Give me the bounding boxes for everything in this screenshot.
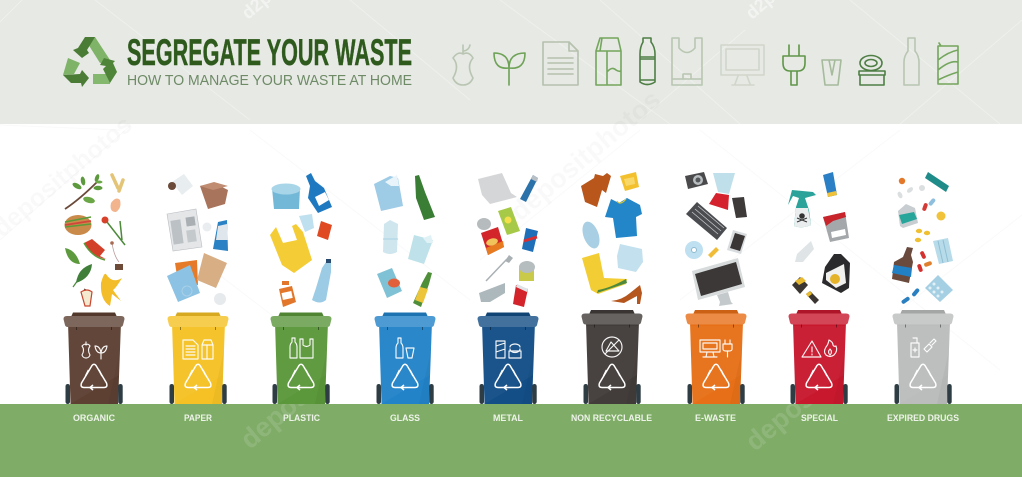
waste items: expired drugs xyxy=(892,172,953,305)
bin: paper xyxy=(168,312,228,404)
bin group: metal xyxy=(477,173,538,424)
waste items: non recyclable xyxy=(579,172,643,304)
bin: expired drugs xyxy=(892,310,954,404)
bin: metal xyxy=(478,312,538,404)
label: non recyclable: NON RECYCLABLE xyxy=(571,413,652,424)
bin group: glass xyxy=(374,175,436,424)
label: expired drugs: EXPIRED DRUGS xyxy=(887,413,959,424)
icon: plastic bag xyxy=(672,38,702,85)
icon: document xyxy=(543,42,578,85)
icon: plug xyxy=(783,45,805,85)
icon: milk carton xyxy=(596,38,621,85)
waste items: glass xyxy=(374,175,435,307)
waste items: paper xyxy=(167,174,228,305)
bin: special xyxy=(788,310,850,404)
label: glass: GLASS xyxy=(390,413,420,424)
waste items: plastic xyxy=(270,173,332,307)
bin group: plastic xyxy=(270,173,332,424)
bin group: special xyxy=(788,172,850,424)
header band xyxy=(0,0,1022,124)
label: special: SPECIAL xyxy=(801,413,838,424)
label: organic: ORGANIC xyxy=(73,413,115,424)
bin: e-waste xyxy=(686,310,746,404)
bin group: paper xyxy=(167,174,228,424)
bin: plastic xyxy=(270,312,332,404)
recycling logo xyxy=(63,37,117,87)
bin group: non recyclable xyxy=(571,172,652,424)
icon: cup xyxy=(822,60,841,85)
watermark text: depositphotos xyxy=(740,314,901,457)
bin: glass xyxy=(374,312,436,404)
watermark text: depositphotos xyxy=(505,84,666,227)
bin: non recyclable xyxy=(582,310,642,404)
icon: glass bottle xyxy=(904,38,919,85)
waste items: organic xyxy=(64,174,125,306)
title: SEGREGATE YOUR WASTE xyxy=(127,32,412,73)
waste items: metal xyxy=(477,173,538,307)
icon: apple core xyxy=(453,45,473,85)
label: paper: PAPER xyxy=(184,413,212,424)
bin group: e-waste xyxy=(685,172,747,424)
icon: tin can xyxy=(859,56,885,85)
waste items: special xyxy=(788,172,850,304)
bin: organic xyxy=(64,312,124,404)
ground band xyxy=(0,404,1022,477)
header icon row xyxy=(453,38,958,85)
subtitle: HOW TO MANAGE YOUR WASTE AT HOME xyxy=(127,72,412,89)
label: plastic: PLASTIC xyxy=(283,413,320,424)
icon: soda can xyxy=(938,43,958,84)
watermark text: depositphotos xyxy=(235,312,396,455)
label: metal: METAL xyxy=(493,413,523,424)
bin group: organic xyxy=(64,174,125,424)
waste items: e-waste xyxy=(685,172,747,306)
label: e-waste: E-WASTE xyxy=(695,413,736,424)
bin group: expired drugs xyxy=(887,172,959,424)
icon: plastic bottle xyxy=(640,38,655,84)
icon: sprout xyxy=(494,53,525,85)
icon: monitor xyxy=(721,45,764,85)
